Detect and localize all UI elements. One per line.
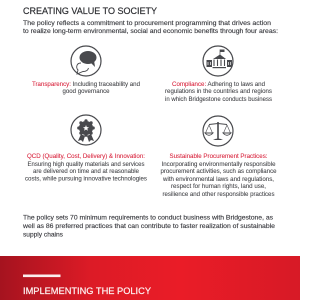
heading: implementing the policy: IMPLEMENTING THE POLICY xyxy=(23,286,152,297)
panel: implementing the policy xyxy=(0,256,300,300)
sustainable procurement text xyxy=(160,154,277,198)
QCD text: are delivered on time and at reasonable xyxy=(33,169,140,175)
compliance text: regulations in the countries and regions xyxy=(165,89,272,95)
icon: scales of justice xyxy=(203,116,233,146)
QCD text: QCD (Quality, Cost, Delivery) & Innovation: xyxy=(27,154,145,160)
QCD text: costs, while pursuing innovative technologies xyxy=(25,176,147,182)
intro text: to realize long-term environmental, social and economic benefits through four areas: xyxy=(23,28,278,35)
closing text: supply chains xyxy=(23,232,63,238)
icon: award rosette xyxy=(71,115,101,145)
icon: speech bubbles xyxy=(71,46,101,76)
QCD text: Ensuring high quality materials and services xyxy=(28,162,144,168)
intro text xyxy=(23,20,278,35)
compliance text: Compliance: Adhering to laws and xyxy=(172,82,265,88)
compliance text xyxy=(165,82,272,103)
sustainable procurement text: procurement activities, such as compliance xyxy=(160,169,277,175)
closing text: The policy sets 70 minimum requirements to conduct business with Bridgestone, as xyxy=(23,214,273,222)
closing text xyxy=(22,214,275,238)
transparency text: good governance xyxy=(62,89,110,95)
intro text: The policy reflects a commitment to procurement programming that drives action xyxy=(23,20,271,27)
sustainable procurement text: Sustainable Procurement Practices: xyxy=(170,154,268,160)
closing text: well as 86 preferred practices that can contribute to faster realization of sustainable xyxy=(22,223,275,230)
transparency text xyxy=(32,82,140,95)
sustainable procurement text: respect for human rights, land use, xyxy=(171,184,266,190)
title: CREATING VALUE TO SOCIETY xyxy=(23,5,158,16)
icon: government building xyxy=(203,46,233,76)
QCD text xyxy=(25,154,147,182)
sustainable procurement text: Incorporating environmentally responsible xyxy=(162,162,276,168)
transparency text: Transparency: Including traceability and xyxy=(32,82,140,88)
sustainable procurement text: resilience and other responsible practices xyxy=(162,192,274,198)
compliance text: in which Bridgestone conducts business xyxy=(165,97,272,103)
sustainable procurement text: with environmental laws and regulations, xyxy=(162,177,274,183)
